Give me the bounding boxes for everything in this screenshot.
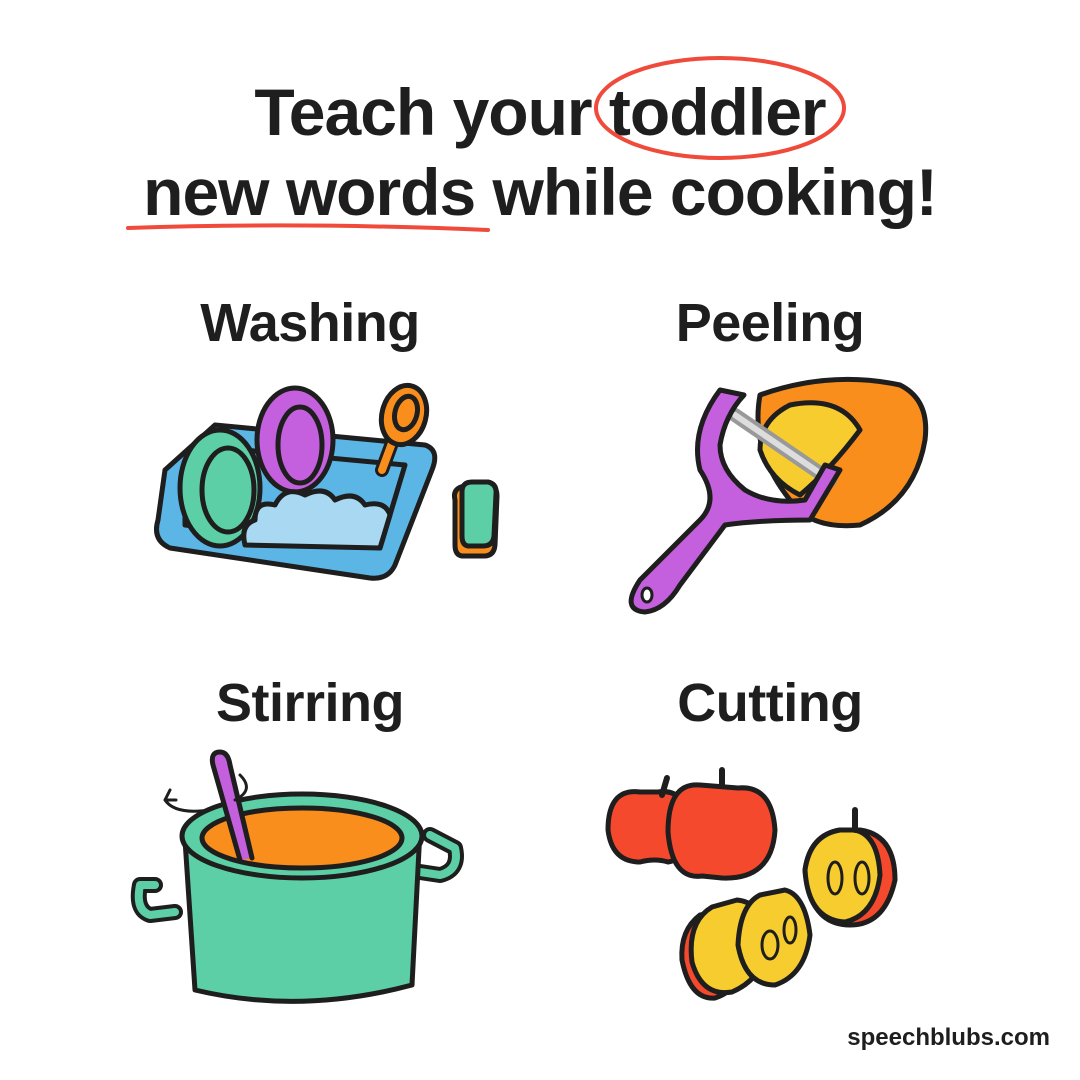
- label: Washing: Washing: [200, 293, 420, 353]
- illustration: stirring: [139, 752, 456, 1001]
- illustration: washing: [156, 380, 497, 578]
- label: Stirring: Stirring: [216, 673, 404, 733]
- title accents: [128, 58, 844, 230]
- footer url: speechblubs.com: [847, 1024, 1050, 1051]
- title: [143, 75, 937, 229]
- label: Cutting: Cutting: [677, 673, 863, 733]
- illustration: peeling: [631, 379, 926, 612]
- label: Peeling: Peeling: [676, 293, 864, 353]
- title: Teach your toddler: [254, 75, 826, 149]
- title: new words while cooking!: [143, 155, 937, 229]
- illustration: cutting: [608, 770, 895, 998]
